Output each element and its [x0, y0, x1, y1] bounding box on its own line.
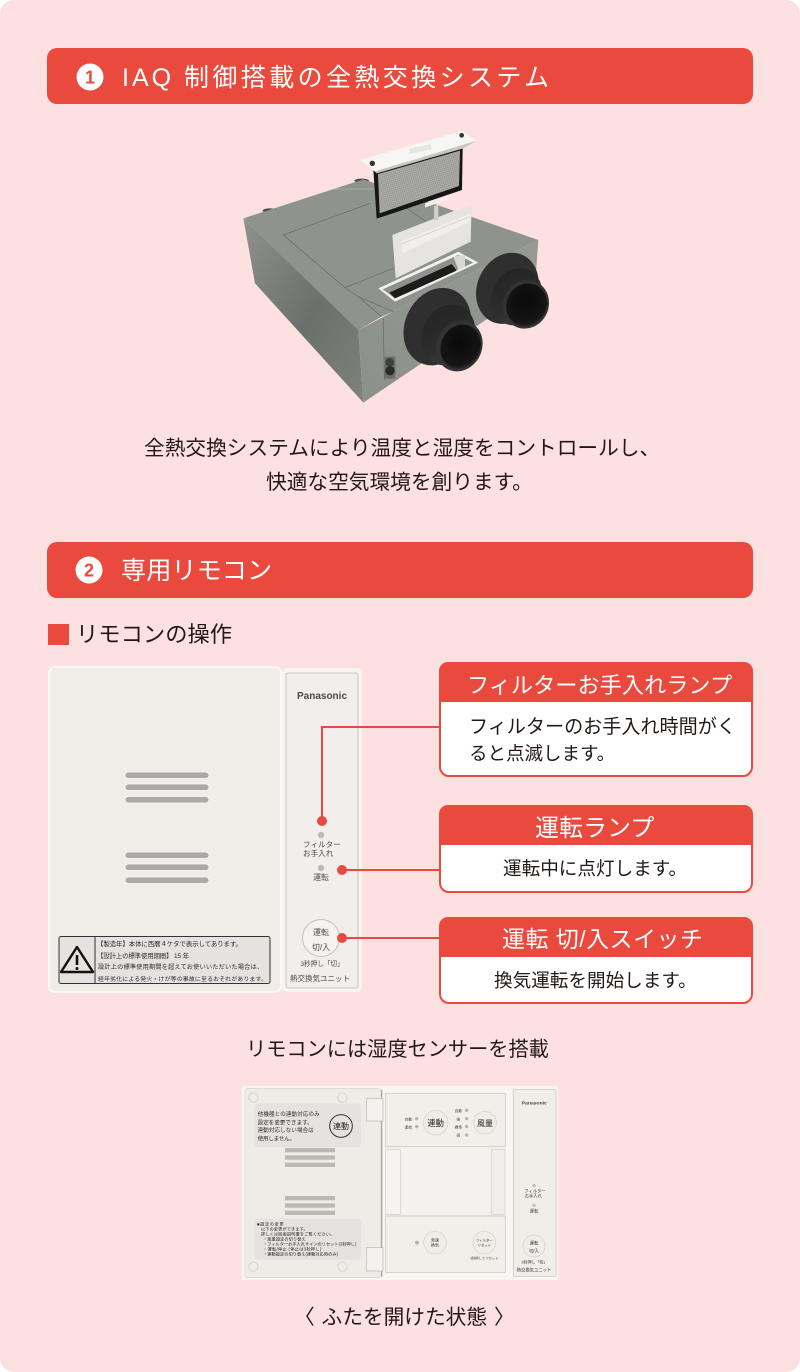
lower control panel [385, 1216, 505, 1273]
hinges [366, 1098, 383, 1271]
callout: on/off switch [439, 917, 753, 1003]
callout body text: フィルターのお手入れ時間がく [469, 716, 736, 738]
top face seams [283, 189, 460, 380]
intro text: 快適な空気環境を創ります。 [266, 471, 533, 494]
heading text 1: IAQ [122, 64, 174, 92]
warning text: 【製造年】本体に西暦４ケタで表示してあります。 [97, 939, 242, 948]
door notice block top: 設定を変更できます。 [258, 1118, 313, 1126]
upper control panel: 連結 [405, 1124, 412, 1129]
open remote control photo [242, 1086, 558, 1280]
right side strip: 運転 [530, 1207, 539, 1214]
photo backing [242, 1086, 558, 1280]
leader line: on/off switch [337, 933, 439, 943]
caption: lid opened: ふたを開けた状態 [322, 1306, 487, 1329]
Panasonic logo: Panasonic [297, 691, 347, 702]
right duct [465, 242, 557, 336]
door notice block bottom: 詳しくは取扱説明書をご覧ください。 [261, 1230, 334, 1236]
on/off button: 運転 [313, 927, 329, 937]
filter lamp and label: お手入れ [303, 848, 334, 858]
callout: filter lamp [439, 662, 753, 776]
door notice block top: 連動対応しない場合は [258, 1126, 314, 1134]
upper control panel: 自動 [455, 1108, 462, 1113]
button caption: 3秒押し「切」 [300, 959, 344, 968]
door vents [285, 1148, 335, 1215]
right side strip: Panasonic [522, 1100, 547, 1106]
right side strip: お手入れ [525, 1193, 543, 1200]
door notice block bottom: ■設定の変更 [257, 1220, 284, 1226]
heading text 2: 専用リモコン [121, 557, 272, 585]
leader line: run lamp [337, 865, 439, 875]
filter lamp and label [303, 832, 341, 858]
remote side panel [282, 668, 362, 992]
center body [385, 1093, 506, 1273]
warning label [59, 936, 270, 984]
door screw circles [249, 1093, 347, 1271]
door notice block top: 他機器との連動対応のみ [258, 1110, 320, 1118]
callout body text: 換気運転を開始します。 [494, 970, 697, 991]
callout: filter lamp: フィルターお手入れランプ [467, 673, 732, 698]
caption: lid opened: 〉 [494, 1306, 515, 1329]
upper control panel: 連動 [427, 1118, 444, 1128]
number badge 2 [76, 556, 102, 584]
run lamp and label [313, 865, 329, 882]
recessed center [386, 1148, 505, 1215]
door notice block top [254, 1103, 361, 1147]
warning text: 設計上の標準使用期間を超えてお使いいただいた場合は、 [98, 963, 263, 971]
intro text [144, 437, 660, 494]
door notice block bottom: ・フィルターお手入れサインのリセット(3秒押し) [263, 1240, 357, 1246]
upper control panel: 風量 [477, 1119, 493, 1128]
upper control panel: 強 [457, 1116, 461, 1121]
unit name: 熱交換気ユニット [290, 973, 350, 983]
lower control panel: リセット [478, 1242, 491, 1247]
filter slot [378, 252, 478, 302]
section heading 2 [47, 542, 753, 598]
door notice block bottom: 以下の変更ができます。 [261, 1225, 308, 1231]
callout body text: 運転中に点灯します。 [503, 858, 687, 879]
callout body text: ると点滅します。 [469, 743, 615, 764]
door notice block bottom: ・風量設定の切り替え [263, 1235, 306, 1241]
vent slots [125, 772, 209, 884]
right side strip: 切/入 [529, 1247, 540, 1254]
inner door [245, 1088, 382, 1278]
callout: run lamp: 運転ランプ [535, 815, 654, 842]
caption: humidity sensor: リモコンには湿度センサーを搭載 [246, 1038, 549, 1061]
lower control panel: フィルター [476, 1238, 493, 1243]
right side strip: 3秒押し「切」 [521, 1258, 547, 1264]
intro text: 全熱交換システムにより温度と湿度をコントロールし、 [144, 437, 660, 460]
number badge 1 [76, 64, 104, 90]
unit left face [243, 218, 363, 403]
upper control panel: 自動 [405, 1116, 412, 1121]
warning text [97, 939, 267, 983]
remote control photo [49, 667, 362, 992]
callout: run lamp [439, 805, 753, 892]
run lamp and label: 運転 [313, 872, 329, 882]
heading text 1: 制御搭載の全熱交換システム [184, 64, 552, 92]
unit top face [243, 179, 538, 330]
door notice block bottom: ・連動設定の切り替え(連動対応時のみ) [263, 1251, 339, 1257]
section heading 1 [47, 48, 753, 104]
air filter [373, 148, 463, 219]
left duct [391, 277, 491, 379]
access panel [392, 196, 472, 278]
number badge 2: 2 [84, 560, 94, 580]
caption: lid opened: 〈 [294, 1306, 315, 1329]
callout body text [469, 716, 736, 764]
warning text: 【設計上の標準使用期間】 15 年 [97, 951, 190, 960]
unit front face [358, 240, 538, 403]
filter top plate [360, 131, 477, 173]
door notice block top: 使用しません。 [258, 1134, 295, 1142]
right side strip [513, 1089, 556, 1277]
back hoses of the unit [263, 179, 369, 213]
on/off button [302, 920, 340, 956]
lower control panel: 急速 [431, 1237, 439, 1243]
callout: on/off switch: 運転 切/入スイッチ [502, 926, 703, 952]
upper control panel: 標準 [455, 1124, 462, 1129]
leader line: filter lamp [317, 727, 439, 826]
right side strip: 運転 [530, 1239, 539, 1246]
on/off button: 切/入 [312, 943, 330, 952]
lower control panel: 換気 [431, 1242, 439, 1248]
right side strip: フィルター [524, 1188, 546, 1195]
right side strip: 熱交換気ユニット [517, 1267, 551, 1274]
warning triangle icon [61, 947, 93, 972]
upper control panel: 弱 [457, 1133, 461, 1137]
door notice block top: 連動 [333, 1121, 349, 1131]
warning text: 経年劣化による発火・けが等の事故に至るおそれがあります。 [98, 975, 267, 983]
filter lamp and label: フィルター [303, 840, 341, 849]
illustration: heat exchange unit [243, 131, 557, 403]
remote door [49, 667, 281, 992]
side connector sockets [385, 357, 395, 379]
door notice block bottom: ・運転/停止 (停止は3秒押し) [263, 1245, 322, 1251]
number badge 1: 1 [85, 68, 95, 88]
subheading: remote operation: リモコンの操作 [76, 622, 232, 647]
door notice block bottom [254, 1219, 361, 1260]
lower control panel: 3秒押してリセット [470, 1255, 499, 1260]
upper control panel [385, 1093, 505, 1147]
